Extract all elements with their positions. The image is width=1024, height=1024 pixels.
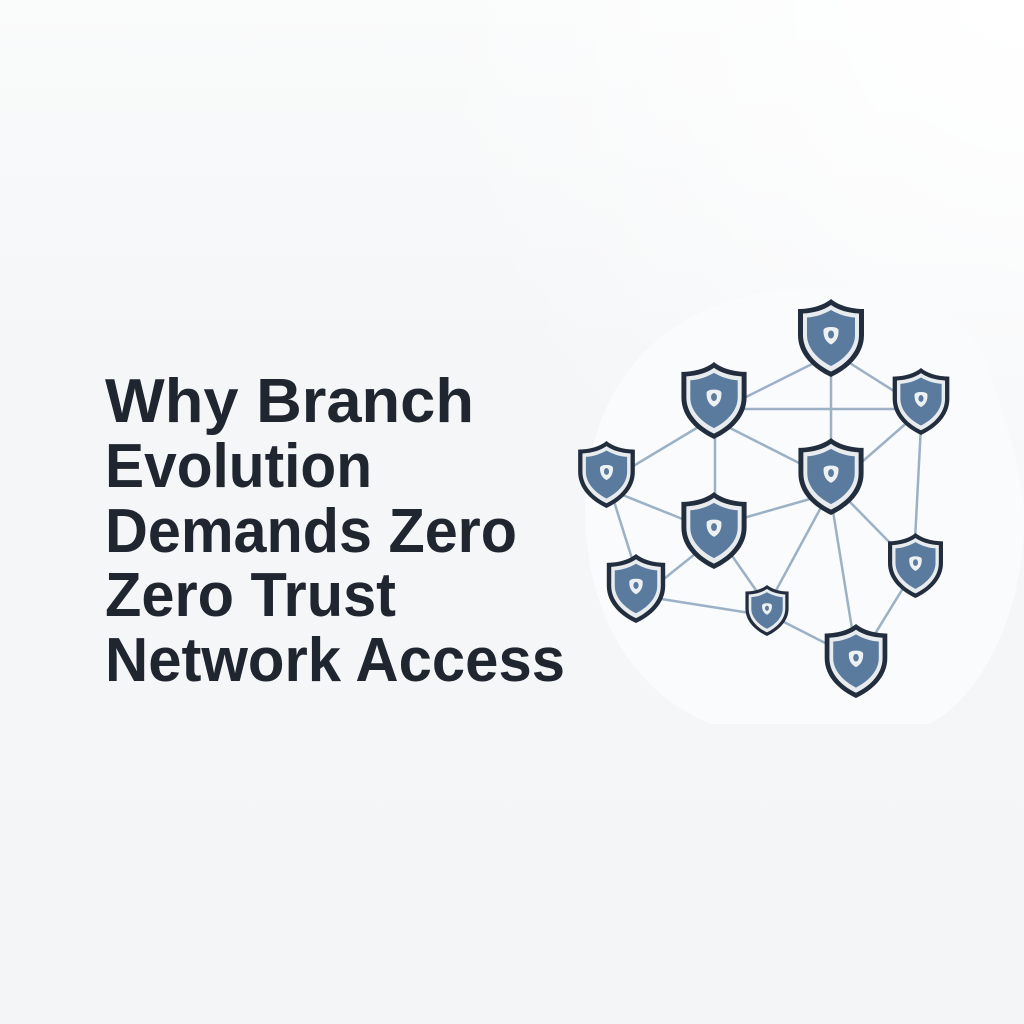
icon: shield upper right	[893, 368, 949, 435]
title	[105, 367, 565, 695]
network connection lines	[612, 360, 921, 648]
title: Why Branch	[105, 367, 474, 436]
icon: shield middle	[681, 492, 747, 569]
title: Evolution	[105, 432, 372, 501]
icon: shield upper left	[681, 362, 747, 439]
title: Zero Trust	[105, 561, 396, 630]
icon: shield bottom	[825, 624, 887, 698]
icon: shield lower left	[607, 554, 665, 623]
icon: shield far left	[578, 441, 635, 508]
title: Network Access	[105, 626, 565, 695]
icon: small shield	[745, 585, 789, 636]
title: Demands Zero	[105, 497, 517, 566]
network backdrop blob	[585, 289, 1024, 724]
icon: shield right	[888, 533, 943, 598]
icon: shield centre	[798, 438, 864, 515]
icon: shield top	[798, 299, 864, 377]
